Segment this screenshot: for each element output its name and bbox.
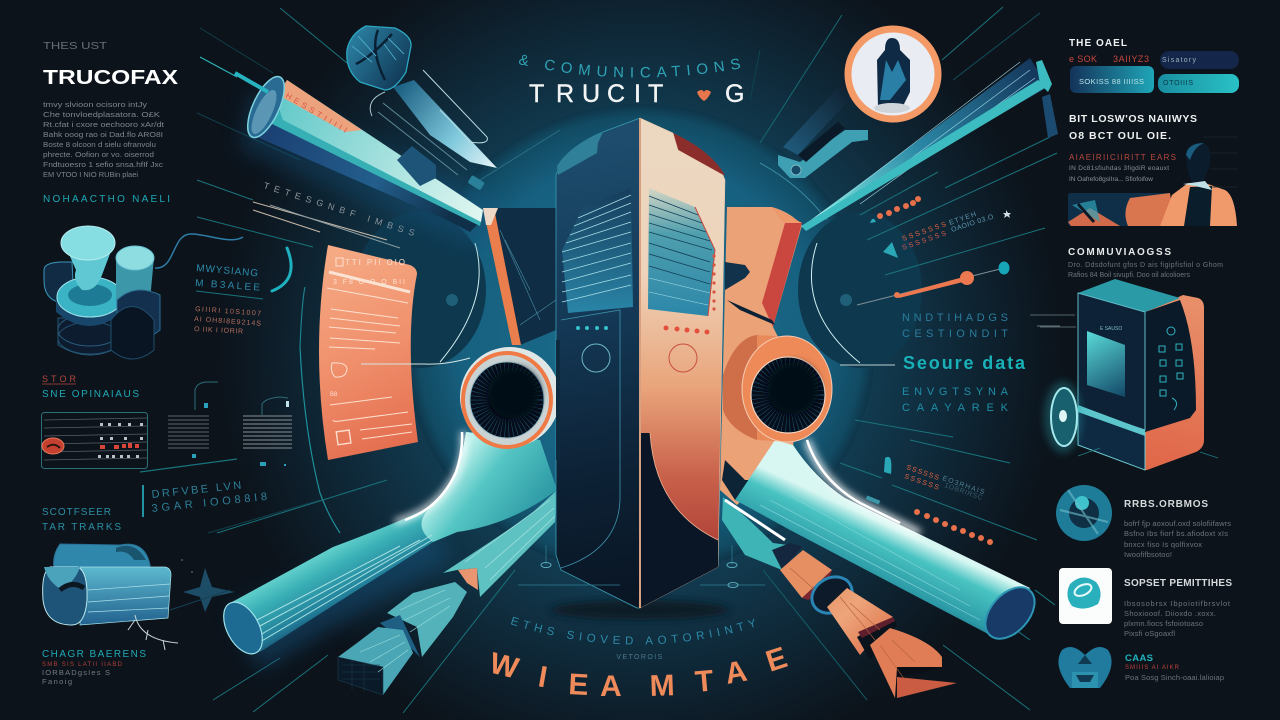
panel: orange document: B8 — [330, 392, 338, 398]
right mid: data rows bottom: SSSSSS — [905, 464, 940, 482]
right: section with person image: O8 BCT OUL OIE. — [1069, 130, 1171, 142]
left title block — [43, 40, 179, 205]
icon: portrait circle — [848, 29, 938, 119]
right mid: data rows top — [870, 196, 1011, 258]
list item: circular image: bofrf fjp aoxouf.oxd solofiifawrs — [1124, 519, 1231, 528]
list item: heart shaped icon: CAAS — [1125, 653, 1153, 664]
left title block: Boste 8 olcoon d sielu ofranvolu — [43, 142, 156, 149]
text: drive label: TAR TRARKS — [42, 522, 121, 533]
right mid: text with secure data: CAAYAREK — [902, 402, 1009, 414]
left title block: TRUCOFAX — [43, 67, 179, 89]
text: drive label: 3GAR IOO88I8 — [151, 491, 268, 515]
icon: communications device: E SAUSO — [1100, 326, 1122, 332]
text: drive label: SCOTFSEER — [42, 507, 111, 518]
right mid: data rows top: SSSSSSS — [901, 221, 947, 243]
image: person banner — [1068, 143, 1237, 226]
text: tilted label top left: TETESGNBF IMBSS — [262, 180, 416, 238]
right mid: data rows top: SSSSSSS — [901, 230, 947, 252]
right: header with pills: 3AIIYZ3 — [1113, 54, 1149, 64]
right: communications heading: Rafios 84 Boil sivupfi. Doo oil alcolioers — [1068, 272, 1190, 279]
icon: communications device — [1030, 279, 1218, 470]
right: header with pills: e SOK — [1069, 54, 1097, 64]
wire connector — [155, 234, 291, 291]
tube: upper left — [235, 72, 500, 250]
left title block: phrecte. Oofion or vo. oiserrod — [43, 152, 154, 159]
right: section with person image: IN Dc81sfiuhdas 3figdiR eoauxt — [1069, 165, 1169, 172]
right mid: data rows bottom: 1OBRIRSC — [943, 482, 983, 502]
left title block: tmvy slvioon ocisoro intJy — [43, 102, 148, 109]
list item: heart shaped icon — [1058, 647, 1224, 688]
left title block: Rt.cfat i cxore oechooro xAr/dt — [43, 122, 164, 129]
right mid: text with secure data: CESTIONDIT — [902, 328, 1008, 340]
tube: upper right beam — [800, 58, 1058, 231]
list item: white card icon: Ibsosobrsx Ibpoiotifbrsvlot — [1124, 599, 1231, 608]
list item: white card icon: Pixsfi oSgoaxfl — [1124, 629, 1175, 638]
list item: heart shaped icon: SMIIIS AI AIKR — [1125, 665, 1180, 671]
panel: orange document: 3 F8 O O O BII — [333, 279, 405, 286]
chart: striped blocks — [168, 382, 292, 466]
list item: circular image: RRBS.ORBMOS — [1124, 499, 1208, 510]
text: charge barriers — [42, 649, 146, 686]
panel: orange document — [319, 245, 470, 460]
text: charge barriers: SMB SIS LATII IIABD — [42, 662, 123, 668]
right mid: text with secure data: ENVGTSYNA — [902, 386, 1009, 398]
title: bottom arc heading: ETHS SIOVED AOTORIINTY — [511, 616, 754, 644]
left mid text: messages: GIIIRI 10S1007 — [195, 306, 261, 318]
right: section with person image: IN Oafrefo8gsIIra... Sfiofoifow — [1069, 176, 1153, 183]
title: bottom arc heading: VETOROIS — [616, 654, 664, 661]
left intake ring — [460, 340, 560, 460]
left title block: Che tonvloedplasatora. O£K — [43, 112, 160, 119]
list item: circular image: Bsfno Ibs fiorf bs.afiodoxt xIs — [1124, 529, 1228, 538]
right: section with person image: AIAEIRIICIIRITT EARS — [1069, 153, 1176, 162]
icon: upper right tool — [778, 80, 868, 178]
right: communications heading: Dro. Ddsdofunt gfos D ais figipfisfiol o Ghom — [1068, 262, 1223, 269]
panel: signal chart — [42, 374, 148, 468]
text: charge barriers: Fanoig — [42, 677, 72, 686]
right mid: data rows bottom: EO3RHAIS — [941, 475, 986, 496]
list item: white card icon: SOPSET PEMITTIHES — [1124, 578, 1232, 589]
left mid text: messages: M B3ALEE — [195, 278, 261, 294]
tube: lower right — [735, 440, 1055, 648]
right mid: data rows top: ETYEH — [948, 211, 977, 227]
right mid: slider — [857, 262, 1010, 305]
title: arc heading — [519, 54, 744, 108]
left mid text: messages: AI OH8I8E9214S — [194, 316, 262, 328]
left title block: Fndtuoesro 1 sefio snsa.hfIf Jxc — [43, 162, 164, 169]
right intake ring — [723, 335, 832, 442]
right mid: text with secure data: NNDTIHADGS — [902, 312, 1008, 324]
list item: circular image: bnxcx fiso Is qolfixvox — [1124, 540, 1202, 549]
icon: top left drill tool — [347, 26, 497, 190]
right: communications heading: COMMUVIAOGSS — [1068, 247, 1171, 258]
left back panel — [483, 208, 556, 345]
icon: glass cylinder stack — [44, 226, 160, 359]
right: header with pills — [1069, 38, 1239, 93]
left title block: THES UST — [43, 40, 108, 52]
tube: lower left segmented cable — [338, 490, 557, 695]
left mid text: messages: MWYSIANG — [196, 263, 259, 279]
right mid: data rows bottom — [866, 457, 993, 545]
text: charge barriers: CHAGR BAERENS — [42, 649, 146, 660]
list item: heart shaped icon: Poa Sosg Sinch-oaai.lalioiap — [1125, 673, 1224, 682]
left mid text: messages: O IIK I IORIR — [194, 326, 243, 336]
right: header with pills: Sisatory — [1162, 57, 1196, 64]
left title block: EM VTOO I NIO RUBin plaei — [43, 172, 138, 179]
tube: upper left: HESSTIIIII — [284, 91, 349, 135]
right: header with pills: OTOIIIS — [1163, 80, 1193, 87]
panel: orange document: TTI PII OIO — [345, 258, 405, 267]
background disc behind tower — [300, 104, 922, 576]
text: drive label — [42, 480, 268, 533]
right mid: text with secure data — [840, 312, 1060, 414]
right: section with person image: BIT LOSW'OS NAIIWYS — [1069, 113, 1197, 125]
right: section with person image — [1068, 113, 1238, 226]
right mid: data rows bottom: SSSSSS — [903, 473, 940, 492]
right: communications heading — [1068, 247, 1223, 279]
tube: lower left with swoosh — [216, 432, 557, 670]
left mid text: messages — [194, 263, 262, 336]
title: bottom arc heading: WIEAMTAE — [486, 641, 791, 703]
list item: white card icon: Shoxiooof. Diioxdo .xoxx. — [1124, 609, 1216, 618]
text: charge barriers: IORBADgsIes S — [42, 668, 110, 677]
right: header with pills: SOKISS 88 IIIISS — [1079, 77, 1144, 86]
left title block: NOHAACTHO NAELI — [43, 194, 170, 205]
text: drive label: DRFVBE LVN — [151, 480, 242, 501]
list item: circular image: Iwoofifbsotoo! — [1124, 550, 1172, 559]
tower left face — [556, 118, 640, 608]
list item: white card icon — [1059, 568, 1232, 638]
orange right back panel — [720, 207, 802, 505]
right mid: text with secure data: Seoure data — [903, 353, 1026, 373]
list item: circular image — [1056, 485, 1231, 559]
title: arc heading: & COMUNICATIONS — [519, 54, 740, 78]
sparkle star — [170, 559, 235, 612]
tube: lower right orange cable — [722, 497, 957, 698]
right mid: data rows top: OAOIO 03.O — [950, 213, 995, 234]
radial accent lines — [140, 7, 1057, 713]
center tower — [518, 118, 765, 620]
icon: curled tube — [43, 544, 178, 650]
tower right face — [640, 118, 725, 608]
list item: white card icon: plxmn.fiocs fsfoiotoaso — [1124, 619, 1203, 628]
panel: signal chart: STOR — [42, 374, 76, 384]
title: arc heading: TRUCITG — [529, 80, 744, 108]
right: header with pills: THE OAEL — [1069, 38, 1127, 49]
panel: signal chart: SNE OPINAIAUS — [42, 389, 139, 400]
left title block: Bahk ooog rao oi Dad.flo ARO8I — [43, 132, 163, 139]
